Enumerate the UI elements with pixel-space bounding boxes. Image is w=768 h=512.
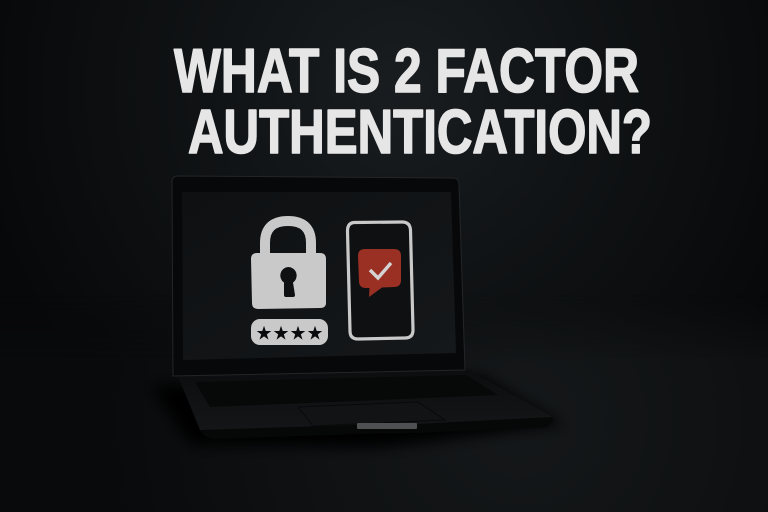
icon: phone [348, 222, 413, 339]
hinge notch [357, 423, 417, 429]
laptop base [178, 369, 553, 439]
title [174, 37, 652, 167]
keyboard [195, 375, 498, 407]
title: AUTHENTICATION? [188, 98, 652, 167]
password field: ★★★★ [256, 322, 324, 344]
laptop screen [182, 192, 456, 360]
icon: padlock [251, 221, 326, 309]
trackpad [298, 402, 445, 426]
keyhole [280, 267, 297, 297]
infographic scene [161, 0, 659, 512]
laptop [172, 176, 553, 439]
title: WHAT IS 2 FACTOR [174, 37, 639, 106]
laptop lid [172, 176, 465, 376]
background floor [286, 356, 768, 512]
icon: message bubble with check [358, 249, 401, 297]
laptop shadow [150, 375, 565, 448]
